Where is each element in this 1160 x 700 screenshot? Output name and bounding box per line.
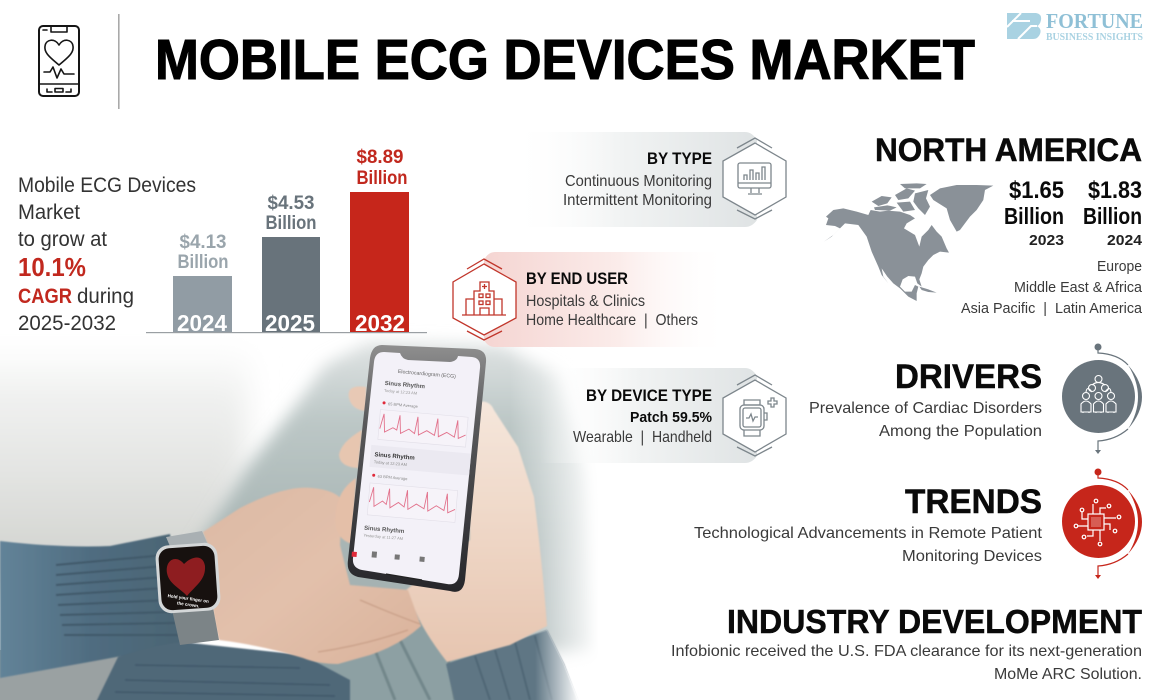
text block: other regions: Middle East & Africa <box>1014 279 1143 296</box>
panel: by end user: BY END USER <box>526 269 628 288</box>
fingers behind phone <box>349 386 366 411</box>
stat: 2024 market value <box>1083 177 1143 249</box>
trousers <box>195 342 600 660</box>
phone readout: ECG cards: 65 BPM Average <box>388 401 419 409</box>
heading: Industry Development: INDUSTRY DEVELOPMENT <box>727 603 1142 640</box>
heading: Trends: TRENDS <box>905 483 1042 521</box>
bar 2025: $4.53 <box>268 193 314 214</box>
icon: monitor hexagon <box>723 138 786 219</box>
phone readout: ECG cards <box>352 366 478 566</box>
bar 2032: Billion <box>356 168 408 189</box>
stat: 2023 market value <box>1004 177 1064 249</box>
bar chart: market size by year <box>146 147 427 336</box>
bar 2024: $4.13 <box>180 232 226 253</box>
icon: hospital hexagon <box>453 259 516 340</box>
bar 2032: $8.89 <box>356 147 404 168</box>
stat: 2023 market value: $1.65 <box>1009 177 1064 204</box>
text block: drivers description: Prevalence of Cardiac Disorders <box>809 400 1042 417</box>
phone readout: ECG cards: Today at 12:23 AM <box>374 459 407 467</box>
text block: other regions: Asia Pacific | Latin America <box>961 300 1143 317</box>
text block: CAGR summary: during <box>77 285 134 308</box>
bar 2032 <box>350 147 409 336</box>
sweater sleeves <box>0 534 578 700</box>
stat: 2024 market value: 2024 <box>1107 232 1143 249</box>
text block: other regions: Europe <box>1097 258 1142 275</box>
heading: Drivers: DRIVERS <box>895 358 1042 396</box>
text block: industry development description: MoMe ARC Solution. <box>994 666 1142 683</box>
text block: trends description: Monitoring Devices <box>902 548 1042 565</box>
stat: 2024 market value: $1.83 <box>1088 177 1142 204</box>
text block: industry development description <box>671 643 1142 683</box>
heading: North America: NORTH AMERICA <box>875 132 1142 168</box>
phone readout: ECG cards: Yesterday at 11:27 AM <box>363 533 403 541</box>
stat: 2023 market value: Billion <box>1004 203 1064 229</box>
panel: by type: BY TYPE <box>647 149 712 168</box>
header divider <box>118 14 120 109</box>
right hand <box>406 401 547 662</box>
phone readout: ECG cards: Sinus Rhythm <box>364 526 404 535</box>
logo: Fortune Business Insights: FORTUNE <box>1046 9 1143 33</box>
stat: 2024 market value: Billion <box>1083 203 1142 229</box>
phone readout: ECG cards: Sinus Rhythm <box>384 381 425 390</box>
icon: smartwatch: the crown. <box>177 600 200 609</box>
panel: by end user <box>453 252 730 347</box>
phone readout: ECG cards: Sinus Rhythm <box>374 452 415 462</box>
bar 2025 <box>262 193 320 336</box>
text block: trends description: Technological Advancements in Remote Patient <box>694 525 1043 542</box>
icon: phone with heart and ECG line <box>39 26 79 96</box>
panel: by end user: Home Healthcare | Others <box>526 312 698 329</box>
pillow backdrop <box>0 345 250 590</box>
text block: CAGR summary: Market <box>18 201 80 224</box>
icon: smartphone showing ECG app <box>348 345 486 592</box>
left hand <box>203 488 421 664</box>
panel: by device type <box>540 368 786 463</box>
logo: Fortune Business Insights <box>1007 9 1143 43</box>
logo: Fortune Business Insights: BUSINESS INSIGHTS <box>1046 32 1143 43</box>
bar 2025: 2025 <box>265 310 315 336</box>
bar 2024: Billion <box>178 252 228 273</box>
map: North America <box>824 183 993 301</box>
icon: smartwatch <box>155 531 221 645</box>
panel: by end user: Hospitals & Clinics <box>526 293 645 310</box>
icon: smartwatch: Hold your finger on <box>167 593 209 604</box>
icon: trends circle with microchip <box>1062 468 1142 579</box>
panel: background photo of hands with phone and smartwatch <box>0 330 668 700</box>
stat: 2023 market value: 2023 <box>1029 232 1064 249</box>
bar 2025: Billion <box>266 213 316 234</box>
panel: by device type: Patch 59.5% <box>630 409 712 426</box>
icon: drivers circle with people group <box>1062 344 1142 454</box>
phone readout: ECG cards: Electrocardiogram (ECG) <box>398 369 456 380</box>
bar 2032: 2032 <box>355 310 405 336</box>
phone readout: ECG cards: 63 BPM Average <box>377 474 408 481</box>
phone readout: ECG cards: Today at 12:23 AM <box>384 388 417 396</box>
panel: by type <box>510 132 786 227</box>
panel: by type: Intermittent Monitoring <box>563 192 712 209</box>
bar 2024 <box>173 232 232 336</box>
icon: smartwatch hexagon <box>723 375 786 456</box>
panel: by device type: Wearable | Handheld <box>573 429 712 446</box>
text block: CAGR summary <box>18 174 196 335</box>
panel: by device type: BY DEVICE TYPE <box>586 386 712 405</box>
text block: industry development description: Infobionic received the U.S. FDA clearance for its next-generation <box>671 643 1142 660</box>
text block: CAGR summary: CAGR <box>18 285 72 308</box>
text block: trends description <box>694 525 1043 565</box>
panel: by type: Continuous Monitoring <box>565 173 712 190</box>
text block: CAGR summary: 10.1% <box>18 252 86 282</box>
text block: drivers description <box>809 400 1042 440</box>
text block: CAGR summary: 2025-2032 <box>18 312 116 335</box>
title: MOBILE ECG DEVICES MARKET <box>155 28 975 92</box>
text block: CAGR summary: to grow at <box>18 228 107 251</box>
text block: other regions <box>961 258 1143 317</box>
text block: CAGR summary: Mobile ECG Devices <box>18 174 196 197</box>
bar 2024: 2024 <box>177 310 227 336</box>
text block: drivers description: Among the Population <box>879 423 1042 440</box>
